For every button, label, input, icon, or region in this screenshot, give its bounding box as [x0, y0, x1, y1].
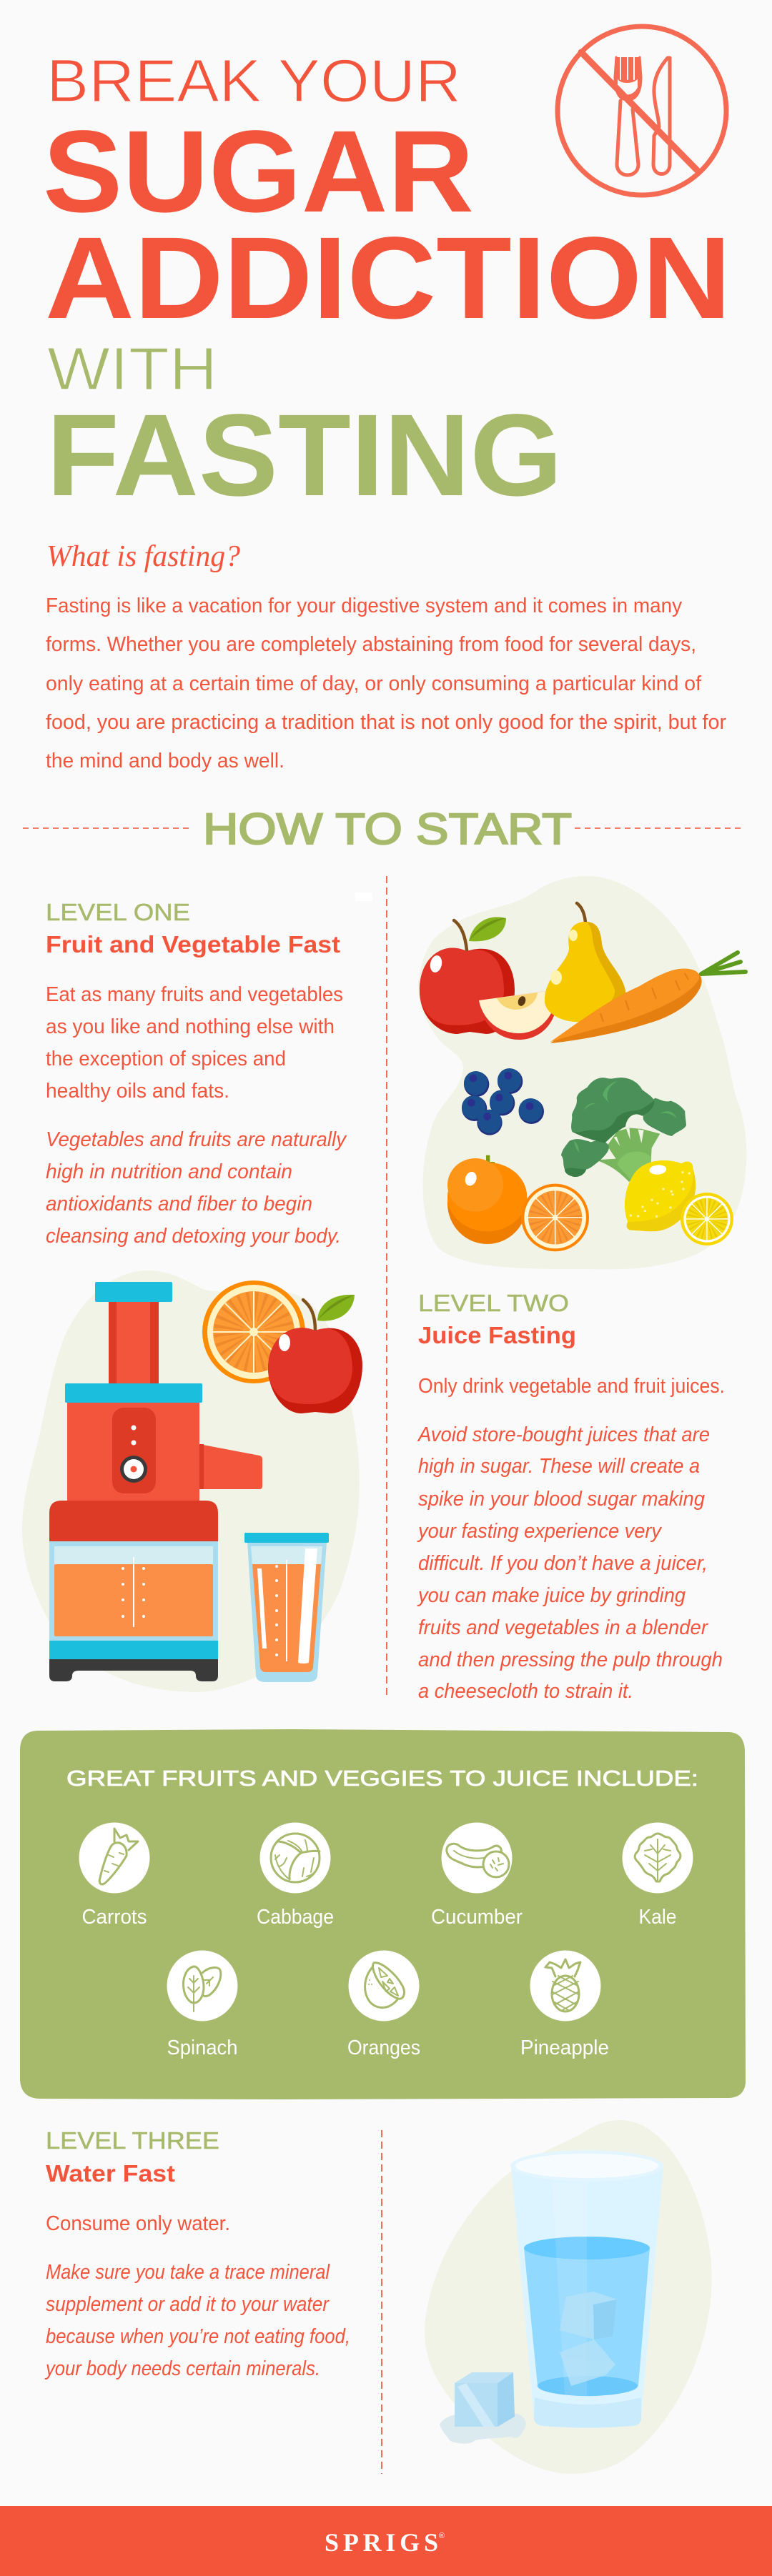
intro paragraph: forms. Whether you are completely abstaining from food for several days,: [46, 633, 696, 656]
item: pineapple: Pineapple: [520, 2037, 609, 2059]
intro paragraph: [46, 595, 727, 772]
intro paragraph: only eating at a certain time of day, or only consuming a particular kind of: [46, 672, 701, 695]
panel: level two text: [417, 1291, 725, 1703]
icon: puddle: [440, 2414, 526, 2444]
level one body: healthy oils and fats.: [46, 1080, 229, 1103]
icon: water glass: [510, 2150, 663, 2428]
icon: orange: [447, 1155, 527, 1244]
icon: ice cube: [455, 2372, 515, 2427]
background blob: [22, 1270, 360, 1692]
illustration: fruits and vegetables: [418, 876, 746, 1269]
registered mark: ®: [439, 2532, 445, 2540]
what is fasting heading: What is fasting?: [46, 540, 240, 573]
item: pineapple: [520, 1951, 609, 2059]
level two italic note: Avoid store-bought juices that are: [417, 1423, 710, 1446]
item: spinach: Spinach: [167, 2037, 237, 2059]
level two italic note: high in sugar. These will create a: [418, 1455, 700, 1478]
icon: orange slice: [521, 1184, 589, 1251]
level three title: Water Fast: [46, 2160, 175, 2187]
icon: lemon: [625, 1160, 696, 1231]
title line: sugar: SUGAR: [43, 106, 474, 237]
title line: addiction: ADDICTION: [45, 212, 731, 343]
icon: apple: [420, 917, 557, 1040]
level one italic note: Vegetables and fruits are naturally: [46, 1128, 347, 1151]
icon: glass of juice: [244, 1533, 329, 1682]
level two italic note: your fasting experience very: [417, 1520, 663, 1543]
panel background: [20, 1729, 746, 2099]
intro paragraph: food, you are practicing a tradition that is not only good for the spirit, but for: [46, 711, 727, 734]
illustration: juicer, glass, orange slice and apple: [22, 1270, 362, 1692]
item: kale: [622, 1822, 693, 1929]
level one body: the exception of spices and: [46, 1048, 286, 1070]
title line: fasting: FASTING: [46, 389, 563, 520]
item: spinach: [167, 1951, 237, 2059]
icon: lemon slice: [681, 1193, 733, 1245]
level two label: LEVEL TWO: [418, 1291, 569, 1317]
panel: great fruits and veggies: [20, 1729, 746, 2099]
level two italic note: difficult. If you don’t have a juicer,: [418, 1552, 708, 1575]
level three italic note: Make sure you take a trace mineral: [46, 2261, 330, 2284]
item: oranges: Oranges: [347, 2037, 420, 2059]
level two italic note: and then pressing the pulp through: [418, 1648, 723, 1671]
level three body: Consume only water.: [46, 2212, 230, 2235]
level one body: Eat as many fruits and vegetables: [46, 983, 343, 1006]
panel: level one text: [46, 900, 347, 1248]
icon: broccoli: [561, 1078, 686, 1182]
level three italic note: supplement or add it to your water: [46, 2293, 330, 2316]
level three italic note: your body needs certain minerals.: [44, 2357, 320, 2380]
intro paragraph: Fasting is like a vacation for your digestive system and it comes in many: [46, 595, 683, 617]
level one italic note: [46, 1128, 347, 1248]
item: cucumber: [431, 1822, 523, 1929]
item: oranges: [347, 1951, 420, 2059]
level two body: Only drink vegetable and fruit juices.: [418, 1375, 725, 1398]
item: carrots: Carrots: [81, 1906, 147, 1929]
level two title: Juice Fasting: [418, 1322, 576, 1348]
title: [43, 47, 731, 520]
level one body: [46, 983, 343, 1103]
background blob: [425, 2120, 712, 2474]
level one label: LEVEL ONE: [46, 900, 190, 926]
level two italic note: spike in your blood sugar making: [418, 1488, 705, 1511]
item: cabbage: Cabbage: [257, 1906, 334, 1929]
illustration: glass of water with ice: [425, 2120, 712, 2474]
item: cucumber: Cucumber: [431, 1906, 523, 1929]
item: kale: Kale: [639, 1906, 676, 1929]
panel heading: GREAT FRUITS AND VEGGIES TO JUICE INCLUDE:: [66, 1766, 698, 1791]
level one italic note: antioxidants and fiber to begin: [46, 1193, 312, 1215]
level three label: LEVEL THREE: [46, 2128, 219, 2154]
level one italic note: high in nutrition and contain: [46, 1160, 292, 1183]
logo: sprigs: SPRIGS: [325, 2528, 438, 2557]
level one title: Fruit and Vegetable Fast: [46, 931, 340, 958]
icon: juicer: [49, 1282, 262, 1681]
level three italic note: because when you’re not eating food,: [46, 2325, 350, 2348]
level two italic note: fruits and vegetables in a blender: [418, 1616, 708, 1639]
item: cabbage: [257, 1822, 334, 1929]
level one body: as you like and nothing else with: [46, 1015, 335, 1038]
level three italic note: [44, 2261, 350, 2380]
section heading: how to start: HOW TO START: [203, 805, 572, 853]
level two italic note: you can make juice by grinding: [417, 1584, 686, 1607]
footer band: [0, 2506, 772, 2576]
icon: orange slice: [202, 1280, 305, 1383]
icon: apple: [268, 1295, 362, 1413]
item: carrots: [79, 1822, 150, 1929]
level two italic note: [417, 1423, 723, 1703]
icon: no eating, crossed fork and knife: [558, 26, 726, 195]
title line: break your: BREAK YOUR: [46, 47, 461, 114]
level two italic note: a cheesecloth to strain it.: [418, 1680, 633, 1703]
background blob: [418, 876, 746, 1269]
level one italic note: cleansing and detoxing your body.: [46, 1225, 341, 1248]
icon: pear: [545, 903, 626, 1022]
title line: with: WITH: [47, 335, 217, 402]
intro paragraph: the mind and body as well.: [46, 750, 284, 772]
panel: level three text: [44, 2128, 350, 2380]
icon: ice cubes in glass: [560, 2292, 617, 2386]
icon: blueberries: [462, 1068, 544, 1135]
icon: carrot: [550, 953, 746, 1043]
